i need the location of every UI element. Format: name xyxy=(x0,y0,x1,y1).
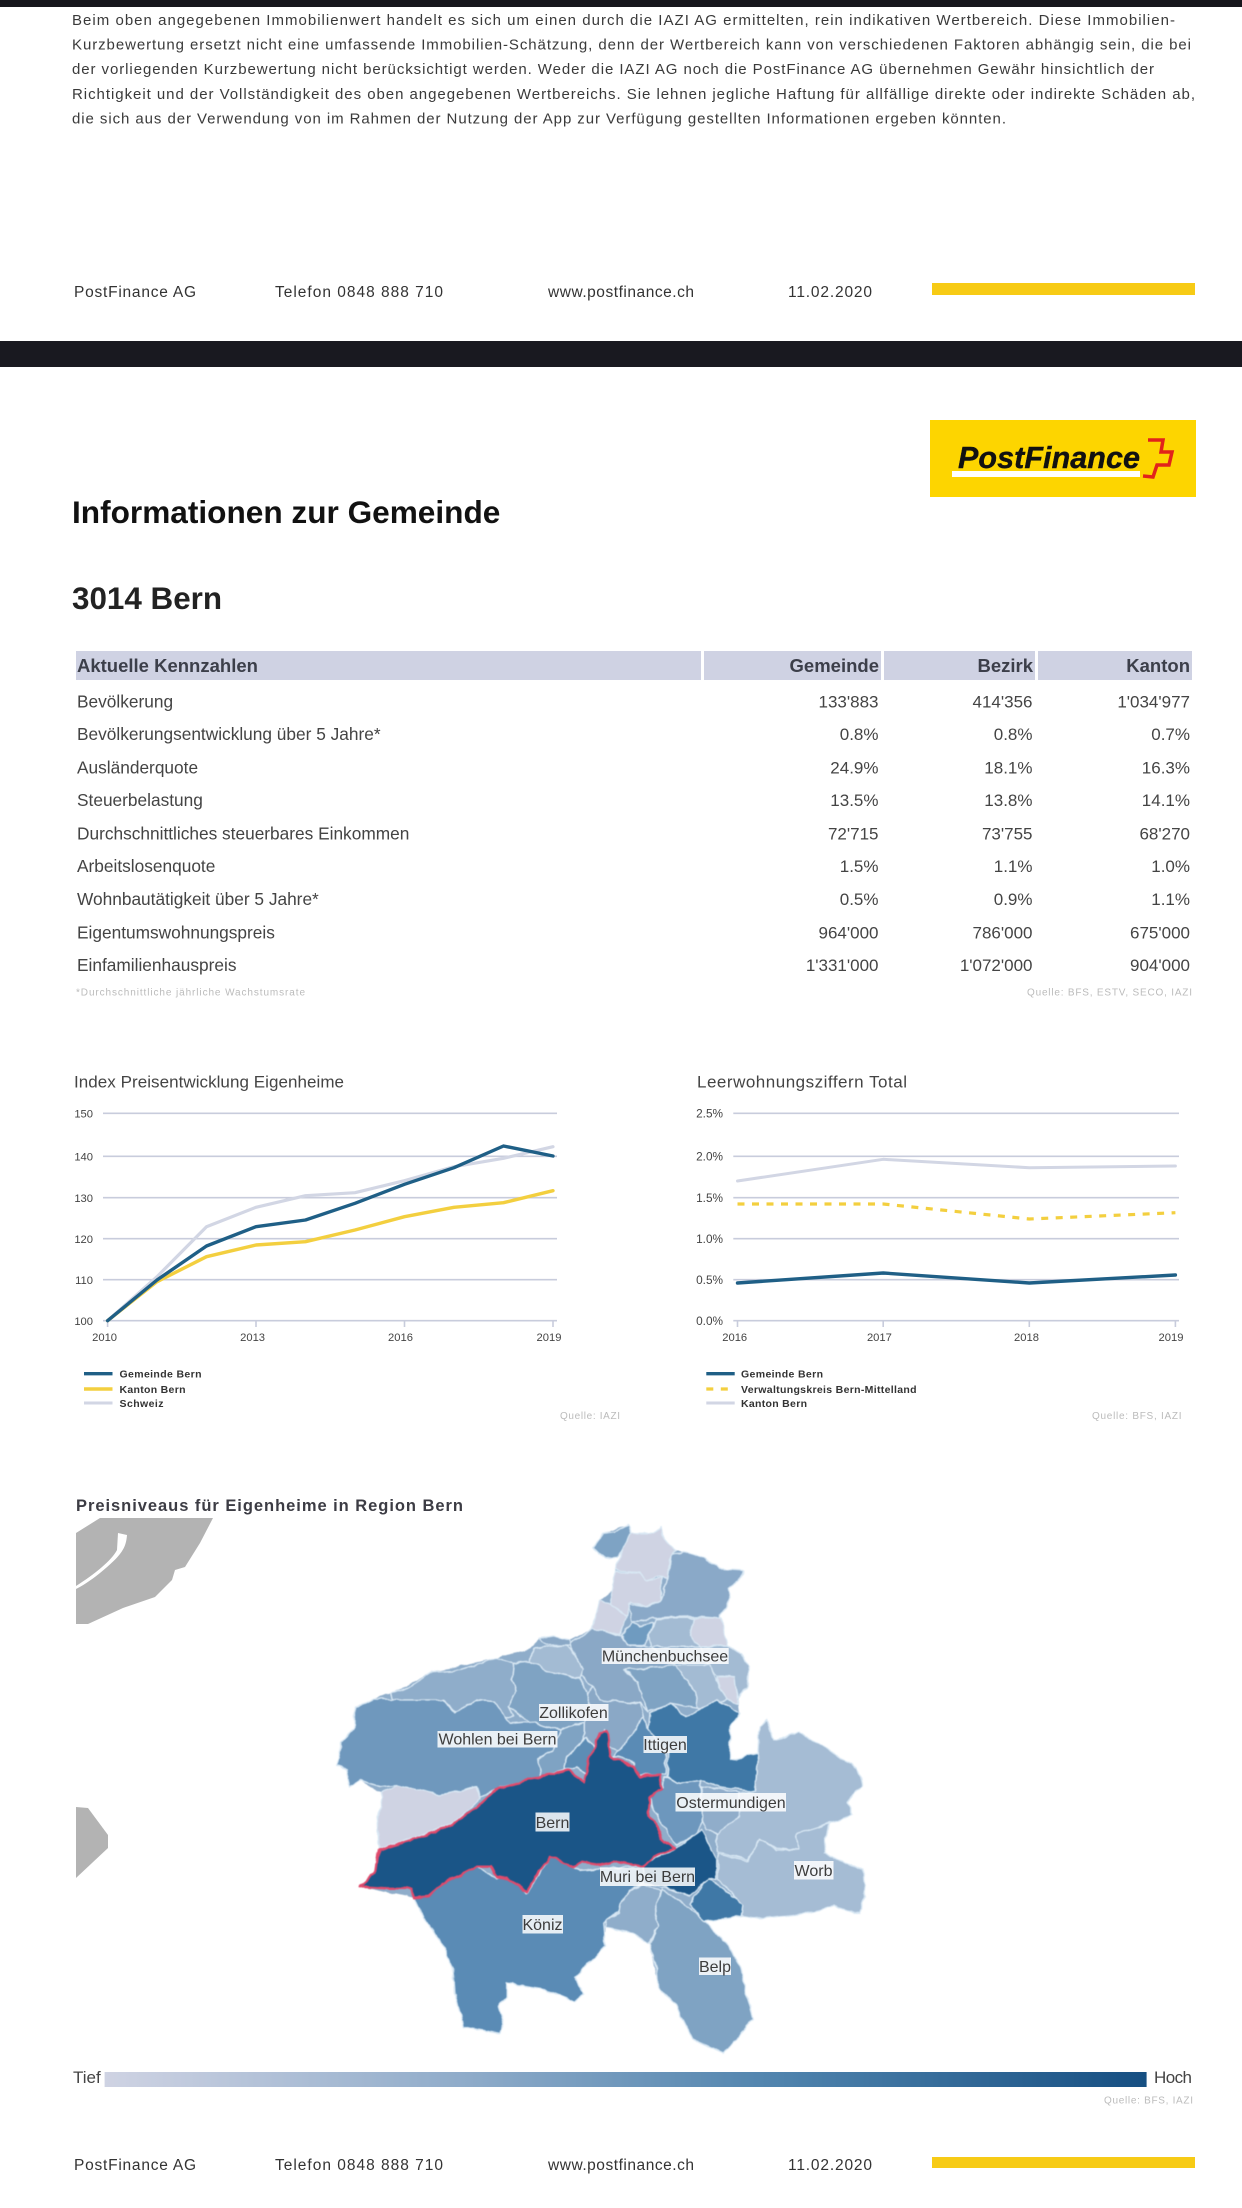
disclaimer text block xyxy=(72,12,1195,128)
row: Eigentumswohnungspreis: 675'000 xyxy=(1130,924,1190,942)
row: Einkommen xyxy=(77,824,1190,844)
row: Bevölkerungsentwicklung xyxy=(77,724,1190,744)
x axis labels xyxy=(92,1332,561,1344)
disclaimer text block: Kurzbewertung ersetzt nicht eine umfassende Immobilien-Schätzung, denn der Wertbereich kann von verschiedenen Faktoren abhängig sein, die bei xyxy=(72,36,1191,54)
chart source: Quelle: IAZI xyxy=(560,1411,620,1422)
legend xyxy=(84,1368,202,1410)
row: Einkommen: Durchschnittliches steuerbares Einkommen xyxy=(77,824,409,844)
disclaimer text block: die sich aus der Verwendung von im Rahmen der Nutzung der App zur Verfügung gestellten Informationen ergeben könnten. xyxy=(72,110,1006,128)
label: Wohlen bei Bern: Wohlen bei Bern xyxy=(438,1732,556,1748)
PostFinance logo: PostFinance xyxy=(958,441,1140,475)
row: Wohnbautätigkeit: 1.1% xyxy=(1151,890,1190,909)
y axis labels: 0.5% xyxy=(696,1273,724,1287)
chart title: Leerwohnungsziffern Total xyxy=(697,1072,907,1092)
row: Bevölkerung: 1'034'977 xyxy=(1117,692,1190,712)
x axis labels xyxy=(722,1332,1183,1344)
row: Eigentumswohnungspreis: Eigentumswohnungspreis xyxy=(77,922,275,942)
line chart: Leerwohnungsziffern Total xyxy=(696,1072,1183,1422)
subtitle: location: 3014 Bern xyxy=(72,581,222,616)
row: Eigentumswohnungspreis xyxy=(77,922,1190,942)
row: Ausländerquote: Ausländerquote xyxy=(77,758,198,778)
label: Ittigen: Ittigen xyxy=(643,1737,687,1754)
row: Einfamilienhauspreis: 1'072'000 xyxy=(960,956,1032,975)
footer: second page: Telefon 0848 888 710 xyxy=(275,2157,443,2174)
disclaimer text block: Richtigkeit und der Vollständigkeit des oben angegebenen Wertbereichs. Sie lehnen jegliche Haftung für allfällige direkte oder indirekte Schäden ab, xyxy=(72,86,1195,103)
chart title: Index Preisentwicklung Eigenheime xyxy=(74,1072,344,1092)
row: Ausländerquote: 24.9% xyxy=(830,758,878,778)
row: Bevölkerung: 133'883 xyxy=(819,692,878,712)
footer: second page: 11.02.2020 xyxy=(788,2157,872,2174)
series: Kanton Bern xyxy=(738,1159,1175,1181)
y axis labels: 100 xyxy=(74,1316,93,1328)
row: Arbeitslosenquote: 1.0% xyxy=(1151,857,1190,876)
label: Muri bei Bern: Muri bei Bern xyxy=(600,1869,695,1886)
x axis labels: 2016 xyxy=(388,1332,413,1344)
legend xyxy=(706,1368,916,1410)
y axis labels: 120 xyxy=(74,1234,93,1246)
series: Verwaltungskreis Bern-Mittelland xyxy=(738,1204,1175,1219)
disclaimer text block: der vorliegenden Kurzbewertung nicht berücksichtigt werden. Weder die IAZI AG noch die PostFinance AG übernehmen Gewähr hinsichtlich der xyxy=(72,61,1154,78)
map: grey lake left xyxy=(76,1807,108,1878)
series: Gemeinde Bern xyxy=(738,1273,1175,1283)
table header: Kanton xyxy=(1126,655,1190,676)
legend: Kanton Bern xyxy=(741,1398,807,1410)
table source: Quelle: BFS, ESTV, SECO, IAZI xyxy=(1027,988,1192,998)
row: Ausländerquote: 16.3% xyxy=(1142,758,1190,778)
row: Steuerbelastung: 13.8% xyxy=(984,791,1032,810)
map: highlighted Gemeinde Bern xyxy=(360,1732,675,1898)
row: Wohnbautätigkeit xyxy=(77,889,1190,909)
label: Ostermundigen: Ostermundigen xyxy=(676,1795,786,1812)
label: Köniz: Köniz xyxy=(522,1917,563,1934)
row: Arbeitslosenquote xyxy=(77,856,1190,876)
PostFinance logo xyxy=(930,420,1196,497)
map source: Quelle: BFS, IAZI xyxy=(1104,2096,1193,2106)
row: Einkommen: 68'270 xyxy=(1139,824,1190,844)
footer: second page: PostFinance AG xyxy=(74,2157,196,2174)
legend: Kanton Bern xyxy=(120,1384,186,1396)
row: Arbeitslosenquote: 1.5% xyxy=(840,857,878,876)
y axis labels xyxy=(74,1108,93,1328)
x axis labels: 2019 xyxy=(1159,1332,1183,1344)
y axis labels: 1.5% xyxy=(696,1191,724,1205)
row: Einfamilienhauspreis xyxy=(77,955,1190,975)
label: Münchenbuchsee: Münchenbuchsee xyxy=(602,1648,728,1666)
row: Einkommen: 73'755 xyxy=(982,824,1032,844)
legend: Verwaltungskreis Bern-Mittelland xyxy=(741,1384,916,1396)
row: Bevölkerungsentwicklung: 0.7% xyxy=(1151,725,1190,744)
row: Bevölkerung: Bevölkerung xyxy=(77,692,173,712)
x axis labels: 2019 xyxy=(537,1332,561,1344)
x axis labels: 2010 xyxy=(92,1332,117,1344)
row: Arbeitslosenquote: Arbeitslosenquote xyxy=(77,856,215,876)
row: Eigentumswohnungspreis: 786'000 xyxy=(973,924,1032,942)
label: Bern: Bern xyxy=(536,1815,569,1832)
row: Bevölkerungsentwicklung: Bevölkerungsentwicklung über 5 Jahre* xyxy=(77,724,381,744)
title: Informationen zur Gemeinde xyxy=(72,494,500,530)
row: Einfamilienhauspreis: 1'331'000 xyxy=(806,956,878,975)
x axis labels: 2018 xyxy=(1014,1332,1039,1344)
row: Ausländerquote xyxy=(77,758,1190,778)
series: Schweiz xyxy=(108,1147,553,1321)
y axis labels xyxy=(696,1106,724,1328)
legend: Gemeinde Bern xyxy=(741,1368,823,1380)
y axis labels: 140 xyxy=(74,1152,93,1164)
footer: first page: www.postfinance.ch xyxy=(547,284,694,301)
price legend: Tief to Hoch xyxy=(73,2068,1192,2087)
price legend: Tief to Hoch: Tief xyxy=(73,2068,101,2087)
footer: first page: PostFinance AG xyxy=(74,284,196,301)
row: Bevölkerungsentwicklung: 0.8% xyxy=(840,725,878,744)
table header: Aktuelle Kennzahlen xyxy=(77,655,258,676)
row: Wohnbautätigkeit: Wohnbautätigkeit über 5 Jahre* xyxy=(77,889,319,909)
y axis labels: 2.5% xyxy=(696,1106,724,1120)
row: Steuerbelastung: 14.1% xyxy=(1142,791,1190,810)
footer: first page: Telefon 0848 888 710 xyxy=(275,284,443,301)
top dark bar xyxy=(0,0,1242,7)
footer: second page xyxy=(74,2157,1195,2174)
row: Eigentumswohnungspreis: 964'000 xyxy=(819,924,878,942)
line chart: Index Preisentwicklung Eigenheime xyxy=(74,1072,620,1422)
x axis labels: 2016 xyxy=(722,1332,747,1344)
row: Einfamilienhauspreis: 904'000 xyxy=(1130,956,1190,975)
row: Wohnbautätigkeit: 0.5% xyxy=(840,890,878,909)
row: Steuerbelastung: 13.5% xyxy=(830,791,878,810)
map heading: Preisniveaus für Eigenheime in Region Bern xyxy=(76,1497,463,1515)
x axis labels: 2013 xyxy=(240,1332,265,1344)
table header: Bezirk xyxy=(977,655,1034,676)
disclaimer text block: Beim oben angegebenen Immobilienwert handelt es sich um einen durch die IAZI AG ermittelten, rein indikativen Wertbereich. Diese Immobilien- xyxy=(72,12,1175,29)
table header xyxy=(76,651,1192,680)
y axis labels: 130 xyxy=(74,1193,93,1205)
y axis labels: 2.0% xyxy=(696,1150,724,1164)
label: Zollikofen: Zollikofen xyxy=(539,1705,608,1722)
table footnote: *Durchschnittliche jährliche Wachstumsrate xyxy=(76,988,305,998)
map: Bern region choropleth xyxy=(337,1524,865,2053)
table header: Gemeinde xyxy=(790,655,879,676)
legend: Gemeinde Bern xyxy=(120,1368,202,1380)
label: Worb: Worb xyxy=(795,1863,833,1880)
y axis labels: 150 xyxy=(74,1108,93,1120)
price legend: Tief to Hoch: Hoch xyxy=(1154,2068,1192,2087)
chart source: Quelle: BFS, IAZI xyxy=(1092,1411,1182,1422)
series: Kanton Bern xyxy=(108,1191,553,1321)
footer: first page xyxy=(74,283,1195,301)
y axis labels: 0.0% xyxy=(696,1314,724,1328)
x axis labels: 2017 xyxy=(867,1332,892,1344)
legend: Schweiz xyxy=(120,1398,164,1410)
row: Arbeitslosenquote: 1.1% xyxy=(994,857,1032,876)
y axis labels: 1.0% xyxy=(696,1232,724,1246)
row: Steuerbelastung: Steuerbelastung xyxy=(77,790,203,810)
row: Bevölkerungsentwicklung: 0.8% xyxy=(994,725,1032,744)
footer: second page: www.postfinance.ch xyxy=(547,2157,694,2174)
row: Wohnbautätigkeit: 0.9% xyxy=(994,890,1032,909)
row: Steuerbelastung xyxy=(77,790,1190,810)
map: grey lake top-left xyxy=(76,1518,213,1624)
row: Einfamilienhauspreis: Einfamilienhauspreis xyxy=(77,955,237,975)
y axis labels: 110 xyxy=(75,1275,93,1287)
row: Einkommen: 72'715 xyxy=(828,824,878,844)
row: Ausländerquote: 18.1% xyxy=(984,758,1032,778)
footer: first page: 11.02.2020 xyxy=(788,284,872,301)
row: Bevölkerung xyxy=(77,692,1190,712)
label: Belp: Belp xyxy=(699,1959,731,1976)
page separator dark bar xyxy=(0,341,1242,367)
series: Gemeinde Bern xyxy=(108,1146,553,1321)
table: Aktuelle Kennzahlen xyxy=(76,651,1192,975)
row: Bevölkerung: 414'356 xyxy=(973,692,1032,712)
map labels xyxy=(438,1648,834,1976)
